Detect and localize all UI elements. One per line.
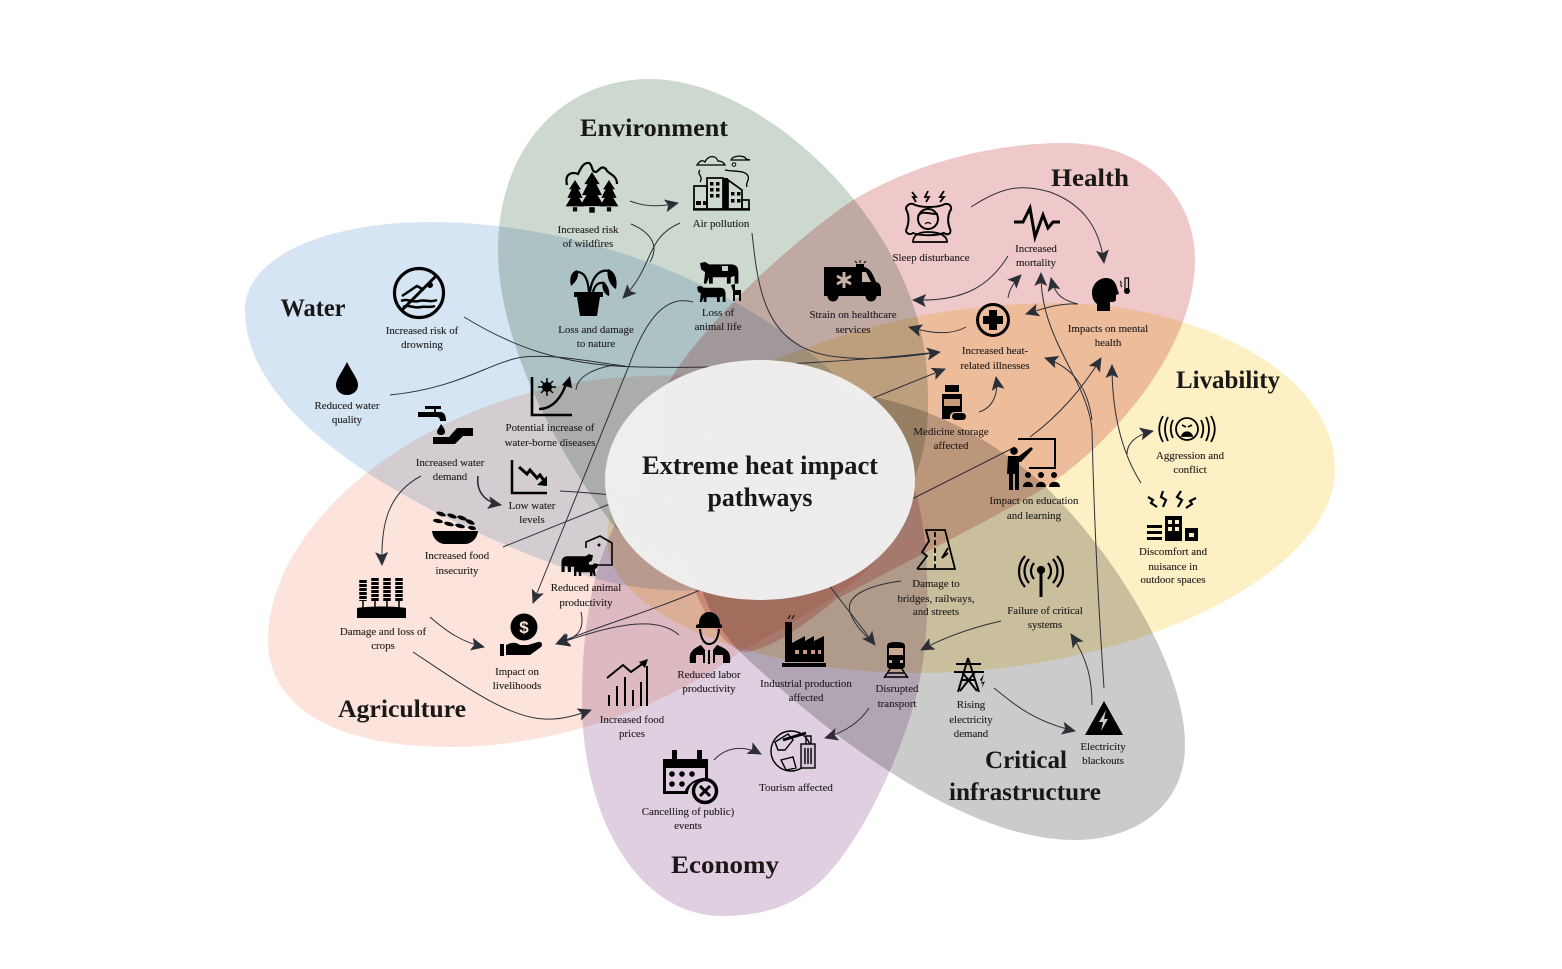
node: reduced labor productivity: productivity xyxy=(682,683,736,695)
centre ellipse xyxy=(605,360,915,600)
node: impact on education and learning: Impact on education xyxy=(990,495,1079,507)
node: discomfort and nuisance: nuisance in xyxy=(1148,561,1198,573)
node: potential increase of water-borne diseases xyxy=(505,376,595,449)
node: loss of animal life xyxy=(695,262,742,333)
centre title xyxy=(642,451,878,512)
icon: angry face with waves xyxy=(1159,416,1215,442)
node: industrial production affected: affected xyxy=(789,692,824,704)
arrow: discomfort to mental health xyxy=(1112,365,1141,483)
arrow: blackouts to critical systems xyxy=(1071,634,1092,705)
heading: critical infrastructure xyxy=(949,747,1101,806)
node: discomfort and nuisance xyxy=(1139,491,1208,586)
petal: agriculture xyxy=(268,375,905,747)
arrow: water demand to low water xyxy=(478,476,501,505)
node: increased mortality: mortality xyxy=(1016,257,1057,269)
node: reduced animal productivity: productivity xyxy=(559,597,613,609)
arrow: mortality to healthcare strain xyxy=(913,256,1008,300)
arrow: blackouts to mortality xyxy=(1041,273,1104,688)
centre title: pathways xyxy=(708,483,812,512)
arrow: discomfort to aggression xyxy=(1127,431,1153,454)
arrow: animal life to livelihoods xyxy=(533,301,693,603)
node: aggression and conflict: conflict xyxy=(1173,464,1207,476)
icon: wheat field xyxy=(357,578,406,618)
node: impact on livelihoods: livelihoods xyxy=(493,680,541,692)
arrow: animal productivity to livelihoods xyxy=(557,612,582,644)
arrow: drowning to heat illnesses xyxy=(464,317,938,367)
arrow: crops to food prices xyxy=(413,652,591,719)
node: increased risk of wildfires xyxy=(558,163,619,250)
node: increased water demand xyxy=(416,406,485,483)
icon: wilting plant xyxy=(570,269,617,316)
node: increased water demand: Increased water xyxy=(416,457,485,469)
node: strain on healthcare services: Strain on healthcare xyxy=(809,309,897,321)
arrow: air pollution to heat illnesses xyxy=(752,233,940,359)
icon: noisy buildings xyxy=(1147,491,1198,541)
arrow: sleep to mental health xyxy=(971,188,1104,263)
icon: power pylon xyxy=(954,658,985,692)
heading: agriculture: Agriculture xyxy=(338,696,466,723)
petal: critical infrastructure xyxy=(691,393,1185,840)
icon: cancelled calendar xyxy=(663,750,716,802)
node: loss and damage to nature: Loss and damage xyxy=(558,324,634,336)
node: impacts on mental health: health xyxy=(1095,337,1122,349)
node: discomfort and nuisance: Discomfort and xyxy=(1139,546,1208,558)
node: tourism affected xyxy=(759,731,833,794)
icon: medical cross xyxy=(978,304,1008,336)
node: cancelling of public events: Cancelling of public) xyxy=(642,806,735,818)
node: strain on healthcare services: services xyxy=(835,324,871,336)
node: medicine storage affected: affected xyxy=(934,440,969,452)
arrow: mental health to mortality xyxy=(1051,278,1078,304)
icon: cracked road xyxy=(917,530,955,569)
node: loss and damage to nature: to nature xyxy=(577,338,615,350)
arrow: food insecurity to heat illnesses xyxy=(503,369,945,547)
node: low water levels xyxy=(509,460,556,526)
node: damage and loss of crops xyxy=(340,578,426,652)
node: medicine storage affected xyxy=(913,385,989,452)
node: impact on livelihoods xyxy=(493,614,542,692)
node: air pollution xyxy=(693,156,750,230)
node: disrupted transport xyxy=(876,642,919,710)
arrow: crops to livelihoods xyxy=(430,617,484,647)
icon: polluted city xyxy=(693,156,750,210)
node: rising electricity demand: demand xyxy=(954,728,989,740)
node: electricity blackouts: Electricity xyxy=(1080,741,1126,753)
node: rising electricity demand: Rising xyxy=(957,699,986,711)
node: increased heat-related illnesses: related illnesses xyxy=(960,360,1030,372)
node: electricity blackouts xyxy=(1080,701,1126,767)
icon: pulse line xyxy=(1014,208,1060,237)
arrow: mental health to heat illnesses xyxy=(1026,304,1078,314)
heading: critical infrastructure: Critical xyxy=(985,747,1067,774)
icon: warning bolt xyxy=(1085,701,1123,735)
petal: economy xyxy=(582,420,927,916)
icon: globe and suitcase xyxy=(771,731,815,771)
arrow: medicine storage to heat illnesses xyxy=(979,377,997,412)
heading: water: Water xyxy=(280,295,346,322)
node: disrupted transport: transport xyxy=(878,698,916,710)
icon: burning trees xyxy=(566,163,618,213)
node: damage and loss of crops: crops xyxy=(371,640,395,652)
icon: ambulance xyxy=(824,260,881,302)
icon: cattle xyxy=(697,262,741,302)
heading: critical infrastructure: infrastructure xyxy=(949,779,1101,806)
arrow: air pollution to nature loss xyxy=(623,223,680,298)
node: cancelling of public events xyxy=(642,750,735,832)
arrow: water demand to crops xyxy=(382,476,421,565)
node: increased risk of wildfires: Increased risk xyxy=(558,224,619,236)
node: loss of animal life: Loss of xyxy=(702,307,735,319)
petal: environment xyxy=(498,79,928,570)
arrow: wildfires to nature loss xyxy=(631,224,654,262)
node: loss and damage to nature xyxy=(558,269,634,350)
node: sleep disturbance xyxy=(892,191,970,264)
node: damage to bridges, railways and streets xyxy=(897,530,975,618)
node: reduced water quality xyxy=(314,362,380,426)
node: reduced water quality: quality xyxy=(332,414,363,426)
node: aggression and conflict: Aggression and xyxy=(1156,450,1225,462)
icon: pill bottle xyxy=(942,385,966,420)
icon: rising bars xyxy=(607,659,648,706)
node: reduced labor productivity xyxy=(677,612,741,695)
icon: teacher and students xyxy=(1007,439,1060,490)
node: failure of critical systems: systems xyxy=(1028,619,1062,631)
node: increased food prices: Increased food xyxy=(600,714,665,726)
petal: water xyxy=(245,222,869,590)
icon: grain bowl xyxy=(432,510,478,544)
node: increased risk of drowning: drowning xyxy=(401,339,443,351)
icon: worker xyxy=(690,612,730,664)
arrow: low water to disrupted transport xyxy=(560,491,875,645)
node: impacts on mental health: Impacts on mental xyxy=(1068,323,1148,335)
node: industrial production affected: Industrial production xyxy=(760,678,852,690)
icon: antenna xyxy=(1019,556,1063,597)
node: medicine storage affected: Medicine storage xyxy=(913,426,989,438)
node: impact on livelihoods: Impact on xyxy=(495,666,539,678)
arrow: cancelled events to tourism xyxy=(714,748,761,760)
node: potential increase of water-borne diseases: Potential increase of xyxy=(506,422,595,434)
heading: environment: Environment xyxy=(580,115,729,142)
node: increased risk of drowning xyxy=(386,268,459,351)
node: damage to bridges, railways and streets: bridges, railways, xyxy=(897,593,975,605)
arrow: branch to heat illnesses xyxy=(1045,358,1092,420)
node: tourism affected: Tourism affected xyxy=(759,782,833,794)
node: cancelling of public events: events xyxy=(674,820,702,832)
node: reduced animal productivity xyxy=(551,536,621,609)
node: low water levels: Low water xyxy=(509,500,556,512)
node: industrial production affected xyxy=(760,615,852,704)
icon: barn and cattle xyxy=(562,536,612,576)
node: aggression and conflict xyxy=(1156,416,1225,476)
node: increased food insecurity xyxy=(425,510,490,577)
node: increased mortality xyxy=(1014,208,1060,269)
icon: tap and hand xyxy=(418,406,473,444)
node: increased heat-related illnesses xyxy=(960,304,1030,372)
node: low water levels: levels xyxy=(519,514,545,526)
node: reduced labor productivity: Reduced labor xyxy=(677,669,741,681)
icon: train xyxy=(884,642,908,678)
node: increased risk of wildfires: of wildfires xyxy=(563,238,613,250)
node: strain on healthcare services xyxy=(809,260,897,336)
node: increased risk of drowning: Increased risk of xyxy=(386,325,459,337)
node: failure of critical systems xyxy=(1007,556,1083,631)
arrow: water quality to heat illnesses xyxy=(390,356,625,395)
node: air pollution: Air pollution xyxy=(693,218,750,230)
icon: hand holding coin: $ xyxy=(519,618,529,637)
node: impact on education and learning: and learning xyxy=(1007,510,1062,522)
node: reduced water quality: Reduced water xyxy=(314,400,380,412)
node: damage to bridges, railways and streets: Damage to xyxy=(912,578,960,590)
node: rising electricity demand: electricity xyxy=(949,714,993,726)
arrow: education to mental health xyxy=(1030,358,1101,437)
heading: health: Health xyxy=(1051,165,1129,192)
node: disrupted transport: Disrupted xyxy=(876,683,919,695)
node: electricity blackouts: blackouts xyxy=(1082,755,1124,767)
arrow: water-borne diseases to heat illnesses xyxy=(576,365,615,390)
node: increased heat-related illnesses: Increased heat- xyxy=(962,345,1028,357)
arrow: education to livelihoods xyxy=(556,447,1015,644)
heading: economy: Economy xyxy=(671,852,780,879)
icon: water drop xyxy=(336,362,358,395)
node: sleep disturbance: Sleep disturbance xyxy=(892,252,970,264)
arrow: heat illnesses to mortality xyxy=(1008,275,1021,298)
centre title: Extreme heat impact xyxy=(642,451,878,480)
icon: restless sleeper xyxy=(906,191,951,242)
icon: falling chart xyxy=(512,460,547,493)
icon: factory xyxy=(782,615,826,667)
arrow: bridges to transport xyxy=(849,581,901,638)
node: increased food insecurity: Increased food xyxy=(425,550,490,562)
node: increased food prices xyxy=(600,659,665,740)
node: impact on education and learning xyxy=(990,439,1079,522)
node: increased food insecurity: insecurity xyxy=(436,565,479,577)
node: potential increase of water-borne diseases: water-borne diseases xyxy=(505,437,595,449)
arrow: critical systems to transport xyxy=(921,621,1001,650)
node: increased mortality: Increased xyxy=(1015,243,1057,255)
node: loss of animal life: animal life xyxy=(695,321,742,333)
arrow: transport to tourism xyxy=(825,708,869,738)
arrow: labor productivity to livelihoods xyxy=(557,624,679,644)
node: rising electricity demand xyxy=(949,658,993,740)
node: impacts on mental health xyxy=(1068,278,1148,349)
node: increased food prices: prices xyxy=(619,728,645,740)
icon: rising germ chart xyxy=(532,376,572,415)
icon: head and thermometer xyxy=(1092,278,1130,311)
petal: health xyxy=(659,143,1195,652)
node: increased water demand: demand xyxy=(433,471,468,483)
arrow: wildfires to air pollution xyxy=(630,201,678,206)
node: discomfort and nuisance: outdoor spaces xyxy=(1140,574,1206,586)
icon: no swimming xyxy=(394,268,444,318)
heading: livability: Livability xyxy=(1176,367,1280,394)
arrow: heat illnesses to healthcare strain xyxy=(909,327,966,333)
node: damage to bridges, railways and streets: and streets xyxy=(913,606,959,618)
node: damage and loss of crops: Damage and loss of xyxy=(340,626,426,638)
petal: livability xyxy=(608,303,1335,673)
node: failure of critical systems: Failure of critical xyxy=(1007,605,1083,617)
node: reduced animal productivity: Reduced animal xyxy=(551,582,621,594)
arrow: electricity demand to blackouts xyxy=(994,688,1075,731)
